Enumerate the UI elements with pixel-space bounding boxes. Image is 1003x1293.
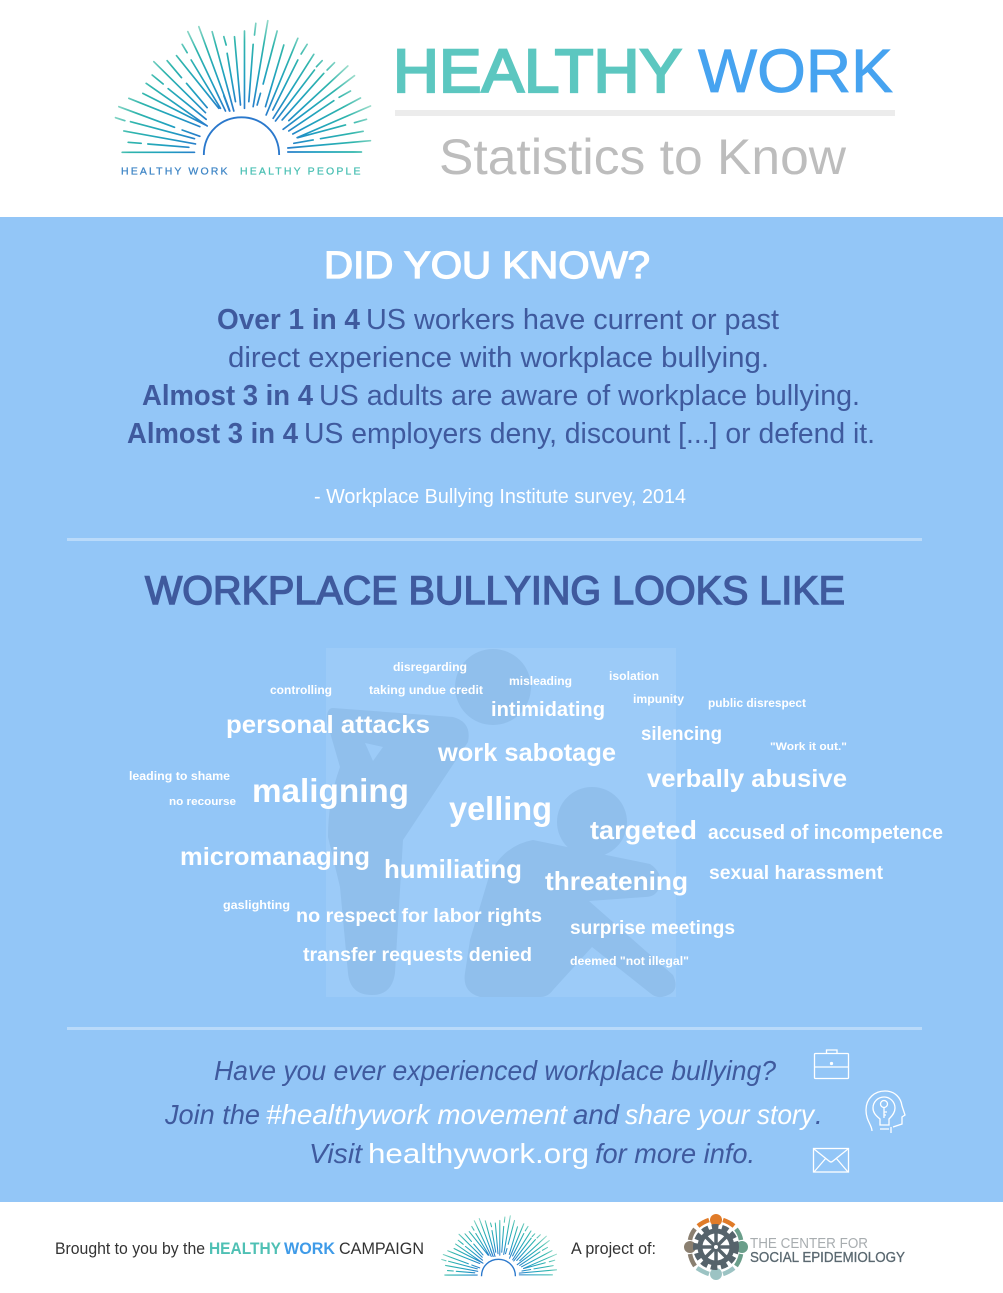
word cloud: intimidating: [491, 699, 605, 721]
word cloud: [129, 660, 943, 968]
word cloud: no recourse: [169, 796, 236, 808]
word cloud: disregarding: [393, 660, 467, 674]
footer credit text: HEALTHY: [209, 1240, 281, 1258]
call to action text: .: [815, 1099, 823, 1130]
word cloud: personal attacks: [226, 711, 430, 739]
subtitle: Statistics to Know: [439, 129, 847, 185]
word cloud: impunity: [633, 692, 684, 706]
word cloud: deemed "not illegal": [570, 954, 689, 968]
statistics text block: direct experience with workplace bullying.: [228, 342, 769, 374]
statistics text block: US adults are aware of workplace bullying.: [319, 380, 860, 412]
word cloud: no respect for labor rights: [296, 906, 542, 927]
heading: workplace bullying: WORKPLACE BULLYING LOOKS LIKE: [145, 569, 845, 613]
icon: head with lightbulb: [866, 1091, 905, 1133]
word cloud: misleading: [509, 674, 572, 688]
word cloud: work sabotage: [437, 739, 616, 767]
call to action text: Have you ever experienced workplace bullying?: [214, 1055, 776, 1086]
word cloud: taking undue credit: [369, 683, 483, 697]
word cloud: micromanaging: [180, 843, 370, 871]
call to action text: and: [573, 1099, 620, 1130]
word cloud: sexual harassment: [709, 863, 884, 884]
logo: center for social epidemiology: [684, 1214, 905, 1280]
statistics text block: [127, 304, 875, 450]
logo tagline: [121, 166, 362, 178]
icon: envelope: [814, 1148, 848, 1172]
footer credit text: [55, 1240, 424, 1258]
statistics text block: Over 1 in 4: [217, 304, 360, 336]
word cloud: threatening: [545, 866, 688, 896]
title rule: [395, 110, 895, 116]
logo tagline: HEALTHY WORK: [121, 166, 229, 178]
call to action text: healthywork.org: [368, 1138, 589, 1169]
footer project label: A project of:: [571, 1240, 656, 1258]
word cloud: verbally abusive: [647, 765, 847, 793]
word cloud: public disrespect: [708, 696, 806, 710]
statistics text block: US employers deny, discount [...] or defend it.: [304, 418, 875, 450]
word cloud: controlling: [270, 683, 332, 697]
word cloud: leading to shame: [129, 769, 230, 783]
word cloud: maligning: [252, 772, 409, 809]
statistics text block: Almost 3 in 4: [142, 380, 313, 412]
logo: center for social epidemiology: SOCIAL EPIDEMIOLOGY: [750, 1249, 905, 1266]
call to action text: for more info.: [595, 1138, 755, 1169]
call to action text: share your story: [625, 1099, 816, 1130]
word cloud: yelling: [449, 790, 552, 827]
icon: briefcase: [814, 1050, 848, 1078]
title: [393, 37, 893, 105]
call to action text: #healthywork movement: [266, 1099, 568, 1130]
word cloud: humiliating: [384, 854, 522, 884]
word cloud: gaslighting: [223, 898, 290, 912]
statistics text block: US workers have current or past: [366, 304, 779, 336]
statistics text block: Almost 3 in 4: [127, 418, 298, 450]
word cloud: surprise meetings: [570, 918, 735, 939]
call to action text: Visit: [309, 1138, 363, 1169]
call to action text: [164, 1055, 823, 1169]
word cloud: "Work it out.": [770, 741, 847, 753]
call to action text: Join the: [164, 1099, 260, 1130]
header logo: sunburst: [115, 21, 370, 155]
title: WORK: [698, 37, 893, 105]
word cloud: targeted: [590, 815, 697, 845]
title: HEALTHY: [393, 37, 682, 105]
word cloud: accused of incompetence: [708, 822, 943, 844]
logo: center for social epidemiology: THE CENTER FOR: [750, 1235, 868, 1252]
footer credit text: Brought to you by the: [55, 1240, 205, 1258]
word cloud: silencing: [641, 724, 722, 745]
word cloud background icon: [326, 648, 676, 997]
heading: did you know: DID YOU KNOW?: [324, 245, 650, 287]
word cloud: transfer requests denied: [303, 945, 532, 966]
word cloud: isolation: [609, 669, 659, 683]
footer logo: sunburst: [442, 1216, 556, 1276]
logo tagline: HEALTHY PEOPLE: [240, 166, 362, 178]
footer credit text: WORK: [284, 1240, 335, 1258]
footer credit text: CAMPAIGN: [339, 1240, 424, 1258]
source citation: - Workplace Bullying Institute survey, 2014: [314, 486, 686, 508]
panel: blue background: [0, 217, 1003, 1202]
